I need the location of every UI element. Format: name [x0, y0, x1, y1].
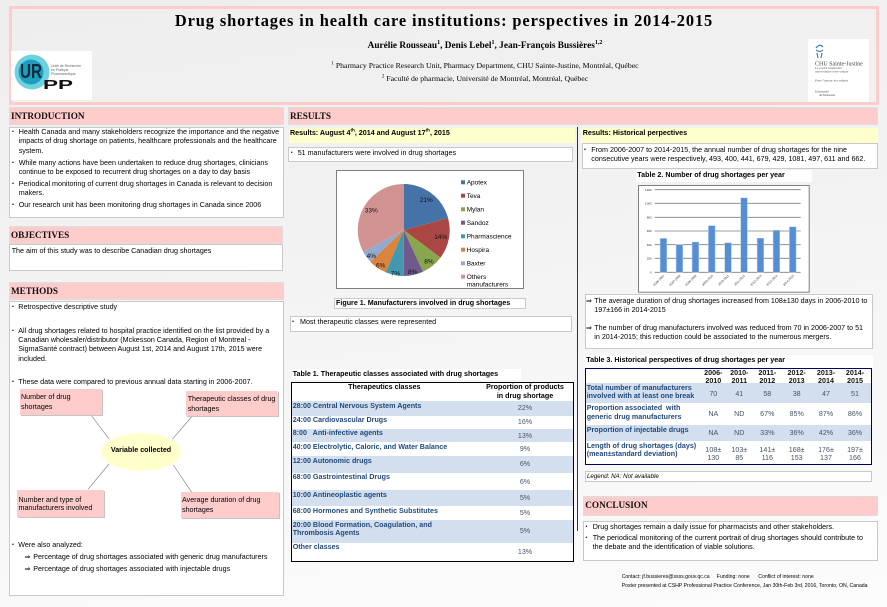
- callout: duration and manufacturers: 197±166 in 2014-2015: [594, 306, 666, 314]
- table 2 title: Table 2. Number of drug shortages per year: [637, 171, 785, 179]
- row: length of shortages: 130: [707, 454, 719, 462]
- panel: introduction: •: [12, 129, 14, 135]
- panel: introduction: [9, 127, 284, 218]
- row: length of shortages: 85: [735, 454, 743, 462]
- row: length of shortages: 116: [762, 454, 773, 462]
- pie chart: manufacturers: 8%: [408, 269, 418, 276]
- logo: URPP research unit: UR: [20, 61, 42, 83]
- row: total manufacturers: involved with at least one break: [587, 392, 694, 400]
- row: generic proportion: 86%: [848, 410, 862, 418]
- row: antineoplastic: 5%: [520, 494, 530, 502]
- table 1 title: [292, 369, 521, 380]
- table 1 header: Proportion of products: [486, 383, 564, 391]
- heading: objectives: [9, 226, 283, 244]
- panel: introduction: •: [12, 160, 14, 166]
- table 1 header: [348, 383, 564, 400]
- panel: introduction: •: [12, 202, 14, 208]
- title: Drug shortages in health care institutions: perspectives in 2014-2015: [175, 11, 713, 30]
- table 3 header: 2015: [847, 377, 863, 385]
- row: central nervous system: 22%: [518, 404, 532, 412]
- row: length of shortages: (mean±standard deviation): [587, 450, 678, 458]
- row: length of shortages: 108±: [705, 446, 721, 454]
- row: length of shortages: Length of drug shortages (days): [587, 442, 696, 450]
- logo: CHU Sainte-Justine: [808, 39, 869, 102]
- logo: URPP research unit: PP: [43, 77, 74, 92]
- pie chart: manufacturers: Apotex: [467, 180, 488, 186]
- logo: CHU Sainte-Justine: CHU Sainte-Justine: [815, 62, 863, 68]
- row: length of shortages: 141±: [759, 446, 775, 454]
- pie chart: manufacturers: Hospira: [467, 247, 489, 254]
- heading: methods: METHODS: [11, 286, 58, 296]
- panel: introduction: system.: [19, 147, 43, 155]
- row: generic proportion: Proportion associated with: [587, 404, 680, 412]
- pie chart: manufacturers: 33%: [365, 207, 378, 214]
- panel: methods: •: [12, 328, 14, 334]
- variable: number of shortages: shortages: [21, 403, 52, 411]
- table 3 header: 2011-: [758, 369, 776, 377]
- row: injectable proportion: NA: [708, 429, 718, 437]
- row: total manufacturers: 47: [822, 390, 830, 398]
- pie chart: manufacturers: 4%: [367, 253, 376, 260]
- logo: URPP research unit: [11, 51, 92, 100]
- heading: results: [288, 107, 878, 125]
- row: generic proportion: 85%: [790, 410, 804, 418]
- row: blood formation: Thrombosis Agents: [293, 529, 359, 537]
- table 3 header: 2012: [759, 377, 775, 385]
- callout: annual shortages: [582, 143, 878, 169]
- heading: introduction: [9, 107, 284, 125]
- table 3 header: 2012-: [788, 369, 806, 377]
- authors: Aurélie Rousseau1, Denis Lebel1, Jean-François Bussières1,2: [368, 39, 602, 50]
- footer: contact and conference: Contact: jf.bussieres@ssss.gouv.qc.ca Funding: none Conflict of interest: none: [622, 574, 814, 580]
- bar chart: shortages per year: 2008-2009: [685, 274, 698, 287]
- table 3 title: [585, 355, 873, 368]
- row: length of shortages: [587, 442, 863, 462]
- pie chart: manufacturers: [336, 170, 524, 289]
- panel: methods: •: [12, 379, 14, 385]
- table 3 header: 2006-: [704, 369, 722, 377]
- callout: duration and manufacturers: in 2014-2015; this reduction could be associated to the numerous mergers.: [594, 333, 831, 341]
- variable: manufacturers: Number and type of: [18, 496, 81, 504]
- row: total manufacturers: 38: [793, 390, 801, 398]
- row: injectable proportion: ND: [734, 429, 744, 437]
- callout: annual shortages: consecutive years were respectively, 493, 400, 441, 679, 429, 1081, 497, 611 and 662.: [591, 155, 865, 163]
- panel: introduction: Health Canada and many stakeholders recognize the importance and the negative: [19, 128, 279, 136]
- variable: average duration: Average duration of drug: [182, 496, 260, 504]
- table 1 title: Table 1. Therapeutic classes associated with drug shortages: [293, 370, 498, 378]
- bar chart: shortages per year: 2009-2010: [701, 274, 714, 287]
- panel: methods: Percentage of drug shortages associated with injectable drugs: [33, 565, 230, 573]
- footer: contact and conference: Poster presented at CSHP Professional Practice Conference, Jan 30th-Feb 3rd, 2016, Toronto, ON, Canada: [622, 583, 868, 589]
- callout: annual shortages: •: [584, 147, 586, 153]
- panel: introduction: Periodical monitoring of current drug shortages in Canada is relevant to decision: [19, 180, 272, 188]
- pie chart: manufacturers: manufacturers: [467, 282, 509, 289]
- row: length of shortages: 168±: [789, 446, 805, 454]
- logo: CHU Sainte-Justine: Le centre hospitalier: [814, 66, 843, 70]
- row: anti-infective: [291, 429, 574, 442]
- panel: methods: Retrospective descriptive study: [18, 303, 117, 311]
- bar chart: shortages per year: 2007-2008: [669, 274, 682, 287]
- pie chart: manufacturers: Baxter: [467, 260, 486, 268]
- panel: introduction: While many actions have been undertaken to reduce drug shortages, clinicians: [19, 159, 268, 167]
- subheading: results 2014-2015: Results: August 4th, 2014 and August 17th, 2015: [290, 128, 450, 137]
- panel: conclusion: •: [586, 524, 587, 530]
- bar chart: shortages per year: 0: [650, 270, 652, 274]
- callout: therapeutic classes: •: [292, 319, 294, 325]
- row: antineoplastic: [291, 490, 574, 506]
- arrows to variables: [88, 416, 192, 492]
- bar chart: shortages per year: 1200: [645, 188, 652, 192]
- subheading: historical perspectives: [581, 128, 878, 143]
- row: antineoplastic: 10:00 Antineoplastic agents: [293, 491, 387, 499]
- row: blood formation: 20:00 Blood Formation, Coagulation, and: [293, 521, 432, 529]
- table 3 header: 2013-: [817, 369, 835, 377]
- row: blood formation: [291, 520, 574, 543]
- bar chart: shortages per year: 600: [647, 229, 652, 233]
- table 3: historical perspectives: [585, 368, 872, 465]
- variable: number of shortages: Number of drug: [21, 393, 71, 401]
- callout: duration and manufacturers: The average duration of drug shortages increased from 108±130 days in 2006-2010 to: [594, 297, 867, 305]
- table 3 header: 2014: [818, 377, 834, 385]
- panel: conclusion: •: [586, 535, 587, 541]
- row: autonomic: [291, 456, 574, 473]
- panel: methods: •: [12, 304, 14, 310]
- row: central nervous system: 28:00 Central Nervous System Agents: [293, 402, 421, 410]
- row: cardiovascular: [293, 416, 532, 426]
- pie chart: manufacturers: 14%: [434, 234, 447, 241]
- row: autonomic: 12:00 Autonomic drugs: [293, 457, 372, 465]
- variable: manufacturers: manufacturers involved: [18, 504, 92, 512]
- callout: duration and manufacturers: [585, 294, 873, 349]
- pie chart: manufacturers: Sandoz: [467, 220, 489, 227]
- row: generic proportion: 67%: [760, 410, 774, 418]
- row: blood formation: 5%: [520, 527, 530, 535]
- bar chart: shortages per year: 1000: [645, 201, 652, 205]
- table 1 header: Therapeutics classes: [348, 383, 420, 391]
- row: hormones: 5%: [520, 509, 530, 517]
- heading: conclusion: [583, 496, 878, 516]
- logo: CHU Sainte-Justine: de Montréal: [819, 93, 835, 97]
- panel: methods: [9, 301, 284, 596]
- bar chart: shortages per year: 800: [647, 215, 652, 219]
- panel: methods: Canadian wholesaler/distributor (Mckesson Canada, Region of Montreal -: [18, 336, 250, 344]
- row: gastrointestinal: 6%: [520, 478, 530, 486]
- heading: introduction: INTRODUCTION: [11, 111, 85, 121]
- legend note: [585, 471, 872, 482]
- row: gastrointestinal: 68:00 Gastrointestinal Drugs: [293, 473, 390, 481]
- row: gastrointestinal: [293, 473, 530, 486]
- callout: therapeutic classes: Most therapeutic classes were represented: [300, 318, 436, 326]
- panel: conclusion: the debate and the identification of viable solutions.: [593, 543, 755, 551]
- panel: conclusion: [583, 521, 878, 561]
- bar chart: shortages per year: 200: [647, 256, 652, 260]
- row: generic proportion: 87%: [819, 410, 833, 418]
- row: electrolytic: 9%: [520, 445, 530, 453]
- affiliation 1: 1 Pharmacy Practice Research Unit, Pharmacy Department, CHU Sainte-Justine, Montréal, Québec: [331, 61, 639, 70]
- table 3 header: 2014-: [846, 369, 864, 377]
- variable: manufacturers: [17, 490, 104, 517]
- row: total manufacturers: 41: [735, 390, 743, 398]
- row: total manufacturers: [585, 383, 872, 403]
- panel: conclusion: The periodical monitoring of the current portrait of drug shortages should contribute to: [593, 534, 863, 542]
- callout: duration and manufacturers: ⇒: [586, 324, 592, 332]
- bar chart: shortages per year: 2013-2014: [766, 274, 779, 287]
- affiliation 2: 2 Faculté de pharmacie, Université de Montréal, Montréal, Québec: [382, 74, 588, 83]
- row: length of shortages: 153: [791, 454, 803, 462]
- row: total manufacturers: 58: [763, 390, 771, 398]
- row: autonomic: 6%: [520, 460, 530, 468]
- row: electrolytic: 40:00 Electrolytic, Caloric, and Water Balance: [293, 443, 447, 451]
- panel: methods: ⇒: [24, 553, 30, 561]
- callout: 51 manufacturers: 51 manufacturers were involved in drug shortages: [298, 149, 456, 157]
- row: electrolytic: [292, 443, 530, 453]
- row: injectable proportion: 33%: [760, 429, 774, 437]
- row: injectable proportion: 36%: [848, 429, 862, 437]
- panel: introduction: makers.: [19, 189, 44, 197]
- callout: 51 manufacturers: [288, 147, 573, 162]
- row: generic proportion: NA: [708, 410, 718, 418]
- row: other classes: [293, 543, 532, 556]
- row: cardiovascular: 16%: [518, 418, 532, 426]
- subheading: historical perspectives: Results: Historical perpectives: [583, 129, 687, 137]
- row: length of shortages: 197±: [847, 446, 863, 454]
- logo: URPP research unit: en Pratique: [51, 68, 68, 72]
- heading: objectives: OBJECTIVES: [11, 230, 69, 240]
- panel: methods: SigmaSanté contract) between August 1st, 2014 and August 17th, 2015 were: [18, 345, 262, 353]
- bar chart: shortages per year: 400: [647, 243, 652, 247]
- row: anti-infective: 13%: [518, 432, 532, 440]
- table 3 header: 2010-: [730, 369, 748, 377]
- row: central nervous system: [291, 401, 574, 416]
- row: injectable proportion: 36%: [790, 429, 804, 437]
- panel: objectives: [9, 244, 283, 270]
- panel: conclusion: Drug shortages remain a daily issue for pharmacists and other stakeholders.: [593, 523, 834, 531]
- panel: introduction: Our research unit has been monitoring drug shortages in Canada since 2006: [19, 201, 261, 209]
- table 3 header: 2011: [732, 377, 747, 385]
- header banner: [9, 6, 879, 105]
- row: length of shortages: 166: [849, 454, 861, 462]
- heading: results: RESULTS: [290, 111, 331, 121]
- variable: therapeutic classes: shortages: [188, 405, 219, 413]
- row: anti-infective: 8:00 Anti-infective agents: [293, 429, 383, 437]
- pie chart: manufacturers: 21%: [420, 197, 433, 204]
- logo: URPP research unit: Pharmaceutique: [51, 72, 76, 76]
- bar chart: shortages per year: 2011-2012: [733, 274, 746, 287]
- row: hormones: 68:00 Hormones and Synthetic Substitutes: [293, 507, 438, 515]
- variable: number of shortages: [20, 389, 102, 415]
- variable: therapeutic classes: [186, 391, 278, 416]
- row: other classes: Other classes: [293, 543, 340, 551]
- table 3 header: 2013: [789, 377, 805, 385]
- table 3 header: 2010: [705, 377, 721, 385]
- footer: contact and conference: [622, 574, 868, 589]
- pie chart: manufacturers: 6%: [376, 262, 386, 269]
- panel: methods: These data were compared to previous annual data starting in 2006-2007.: [18, 378, 253, 386]
- subheading: results 2014-2015: [289, 128, 575, 143]
- pie chart: manufacturers: Others: [467, 274, 487, 281]
- table 3 title: Table 3. Historical perspectives of drug shortages per year: [586, 356, 785, 364]
- panel: methods: •: [12, 542, 14, 548]
- logo: CHU Sainte-Justine: universitaire mère-enfant: [815, 70, 848, 74]
- logo: URPP research unit: Unité de Recherche: [51, 64, 81, 68]
- table 2 title: [636, 170, 812, 182]
- row: total manufacturers: 51: [851, 390, 859, 398]
- row: injectable proportion: [585, 425, 872, 441]
- pie chart: manufacturers: Pharmascience: [467, 234, 512, 240]
- row: injectable proportion: 42%: [819, 429, 833, 437]
- logo: CHU Sainte-Justine: Université: [815, 90, 829, 94]
- pie chart: manufacturers: Mylan: [467, 206, 484, 214]
- variable: average duration: shortages: [182, 506, 213, 514]
- panel: objectives: The aim of this study was to describe Canadian drug shortages: [12, 247, 211, 255]
- central ellipse: [101, 433, 181, 471]
- row: length of shortages: 103±: [731, 446, 747, 454]
- panel: methods: Percentage of drug shortages associated with generic drug manufacturers: [33, 553, 267, 561]
- table 1: therapeutic classes: [291, 382, 574, 562]
- bar chart: shortages per year: 2012-2013: [750, 274, 763, 287]
- callout: therapeutic classes: [290, 316, 572, 332]
- panel: methods: Were also analyzed:: [18, 541, 83, 549]
- panel: methods: ⇒: [24, 565, 30, 573]
- bar chart: shortages per year: 2014-2015: [782, 274, 795, 287]
- row: generic proportion: ND: [734, 410, 744, 418]
- callout: duration and manufacturers: ⇒: [586, 297, 592, 305]
- row: length of shortages: 176±: [818, 446, 834, 454]
- variable: therapeutic classes: Therapeutic classes of drug: [188, 395, 275, 403]
- figure caption: [334, 298, 526, 309]
- bar chart: shortages per year: 2010-2011: [717, 274, 730, 287]
- pie chart: manufacturers: 8%: [424, 258, 434, 265]
- bar chart: shortages per year: [638, 185, 810, 293]
- figure caption: Figure 1. Manufacturers involved in drug shortages: [336, 299, 510, 307]
- heading: conclusion: CONCLUSION: [585, 500, 648, 510]
- callout: annual shortages: From 2006-2007 to 2014-2015, the annual number of drug shortages for the nine: [591, 146, 847, 154]
- row: generic proportion: [587, 404, 862, 421]
- row: total manufacturers: 70: [709, 390, 717, 398]
- logo: CHU Sainte-Justine: Pour l'amour des enfants: [814, 78, 849, 82]
- panel: introduction: impacts of drug shortage on patients, healthcare professionals and the healthcare: [19, 137, 277, 145]
- row: total manufacturers: Total number of manufacturers: [587, 384, 692, 392]
- panel: methods: All drug shortages related to hospital practice identified on the list provided by a: [18, 327, 269, 335]
- panel: introduction: •: [12, 181, 14, 187]
- row: hormones: [293, 507, 530, 517]
- row: other classes: 13%: [518, 548, 532, 556]
- bar chart: shortages per year: 2006-2007: [653, 274, 666, 287]
- callout: duration and manufacturers: The number of drug manufacturers involved was reduced from 70 in 2006-2007 to 51: [594, 324, 863, 332]
- pie chart: manufacturers: Teva: [467, 193, 481, 200]
- pie chart: manufacturers: 7%: [391, 270, 400, 277]
- callout: 51 manufacturers: •: [291, 150, 293, 156]
- legend note: Legend: NA: Not available: [587, 473, 659, 480]
- panel: introduction: continue to be exposed to recurrent drug shortages on a day to day basis: [19, 168, 250, 176]
- variable: average duration: [181, 492, 279, 518]
- panel: methods: included.: [18, 355, 47, 363]
- vertical divider: [577, 127, 578, 531]
- heading: methods: [9, 282, 284, 300]
- row: length of shortages: 137: [820, 454, 832, 462]
- row: injectable proportion: Proportion of injectable drugs: [587, 426, 689, 434]
- table 1 header: in drug shortage: [497, 392, 553, 400]
- row: cardiovascular: 24:00 Cardiovascular Drugs: [293, 416, 387, 424]
- row: generic proportion: generic drug manufacturers: [587, 413, 682, 421]
- table 3 header: [704, 369, 864, 385]
- central ellipse: Variable collected: [111, 446, 171, 454]
- diagram: variable collected: [17, 389, 280, 519]
